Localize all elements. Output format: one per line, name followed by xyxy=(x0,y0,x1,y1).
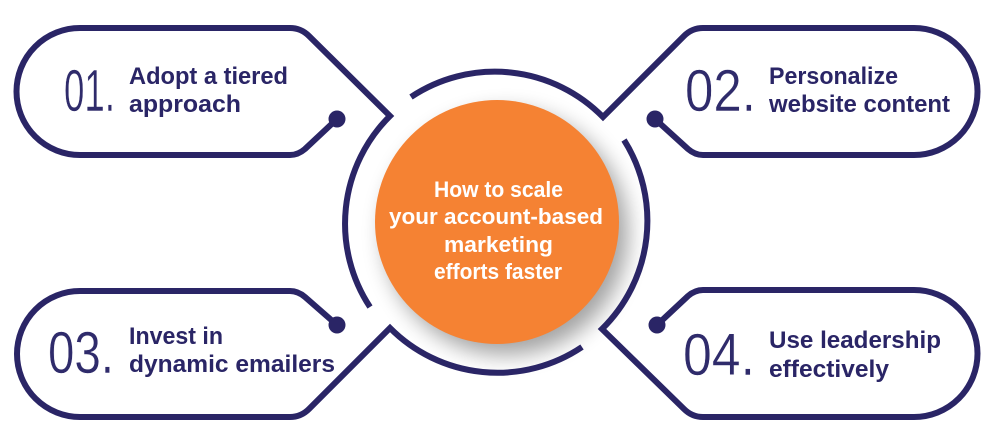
panel 4 text: Use leadership xyxy=(769,327,941,354)
panel 2 text: website content xyxy=(768,91,950,118)
panel 3 number: 03. xyxy=(48,320,114,386)
panel 1 text: Adopt a tiered xyxy=(129,63,288,90)
panel 4 text: effectively xyxy=(769,356,889,383)
panel 2 outline with ring arc xyxy=(411,28,978,155)
panel 4 text xyxy=(769,327,941,383)
central title: How to scale xyxy=(434,177,563,202)
panel 1 outline with ring arc xyxy=(16,28,390,307)
panel 1: Adopt a tiered approach xyxy=(16,28,390,307)
panel 2 text xyxy=(768,63,950,118)
panel 1 text xyxy=(129,63,288,118)
central title: your account-based xyxy=(389,204,603,229)
panel 1 number: 01. xyxy=(64,58,115,124)
panel 3: Invest in dynamic emailers xyxy=(17,291,582,417)
panel 1 connector dot xyxy=(328,110,346,128)
panel 4 outline with ring arc xyxy=(602,140,978,417)
panel 2 text: Personalize xyxy=(769,63,898,90)
circle shadow xyxy=(384,111,628,355)
panel 2 number: 02. xyxy=(685,58,756,124)
panel 3 text xyxy=(129,323,335,378)
panel 4: Use leadership effectively xyxy=(602,140,978,417)
central hub: orange circle with text xyxy=(375,100,628,355)
panel 4 number: 04. xyxy=(683,322,755,388)
central title: marketing xyxy=(444,232,553,257)
panel 3 text: Invest in xyxy=(129,323,223,350)
orange circle xyxy=(375,100,619,344)
panel 3 connector dot xyxy=(328,316,346,334)
panel 3 outline with ring arc xyxy=(17,291,582,417)
central title xyxy=(389,177,603,284)
panel 2: Personalize website content xyxy=(411,28,978,155)
panel 2 connector dot xyxy=(646,110,664,128)
panel 1 text: approach xyxy=(129,91,241,118)
panel 3 text: dynamic emailers xyxy=(129,351,335,378)
central title: efforts faster xyxy=(434,259,562,284)
panel 4 connector dot xyxy=(648,316,666,334)
